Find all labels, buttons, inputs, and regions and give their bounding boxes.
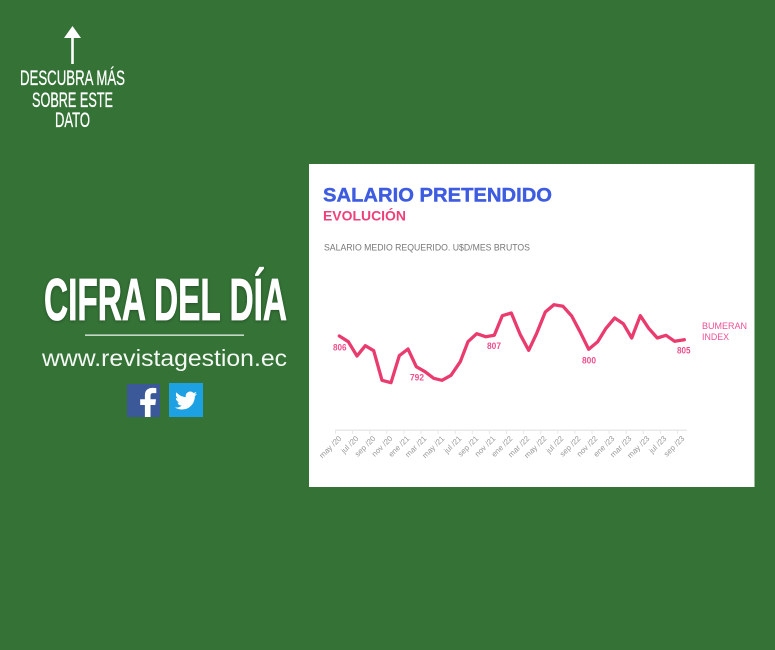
title: cifra del día: CIFRA DEL DÍA xyxy=(44,267,287,333)
x axis labels xyxy=(317,434,686,460)
x axis labels: ene /22 xyxy=(490,434,514,459)
chart title: SALARIO PRETENDIDO xyxy=(323,184,552,206)
x axis labels: sep /20 xyxy=(353,434,378,459)
icon: twitter xyxy=(169,383,203,417)
x axis labels: jul /21 xyxy=(442,434,463,456)
x axis labels: sep /22 xyxy=(558,434,582,459)
x axis labels: ene /21 xyxy=(387,434,411,459)
website url: www.revistagestion.ec xyxy=(41,345,287,371)
text: descubra más sobre este dato: DESCUBRA MÁS xyxy=(20,67,125,90)
x axis xyxy=(335,430,687,434)
x axis labels: may /23 xyxy=(625,434,651,460)
x axis labels: jul /20 xyxy=(339,434,361,456)
x axis labels: mar /22 xyxy=(506,434,531,459)
x axis labels: jul /23 xyxy=(647,434,668,456)
series label xyxy=(702,321,747,343)
data labels: 805 xyxy=(677,346,690,356)
x axis labels: nov /21 xyxy=(473,434,497,459)
data labels xyxy=(333,341,690,383)
data labels: 806 xyxy=(333,343,346,353)
x axis labels: mar /23 xyxy=(608,434,633,459)
x axis labels: nov /22 xyxy=(575,434,599,459)
x axis labels: nov /20 xyxy=(370,434,395,459)
data labels: 807 xyxy=(487,341,501,351)
x axis labels: may /21 xyxy=(420,434,446,460)
x axis labels: may /22 xyxy=(522,434,548,460)
data labels: 792 xyxy=(410,373,424,383)
text: descubra más sobre este dato xyxy=(20,67,125,132)
x axis labels: sep /21 xyxy=(456,434,480,459)
x axis labels: jul /22 xyxy=(544,434,565,456)
series label: INDEX xyxy=(702,332,730,343)
x axis labels: mar /21 xyxy=(403,434,428,459)
x axis labels: may /20 xyxy=(317,434,344,460)
chart description: SALARIO MEDIO REQUERIDO. U$D/MES BRUTOS xyxy=(324,242,530,252)
panel: chart card xyxy=(309,164,754,487)
text: descubra más sobre este dato: SOBRE ESTE xyxy=(32,89,113,112)
data labels: 800 xyxy=(582,356,596,366)
chart subtitle: EVOLUCIÓN xyxy=(323,208,406,224)
icon: up arrow xyxy=(64,26,81,64)
divider line xyxy=(85,334,244,336)
x axis labels: ene /23 xyxy=(592,434,616,459)
series label: BUMERAN xyxy=(702,321,747,332)
x axis labels: sep /23 xyxy=(662,434,686,459)
line chart: bumeran index xyxy=(339,305,684,383)
text: descubra más sobre este dato: DATO xyxy=(55,109,90,132)
icon: facebook xyxy=(127,384,160,417)
